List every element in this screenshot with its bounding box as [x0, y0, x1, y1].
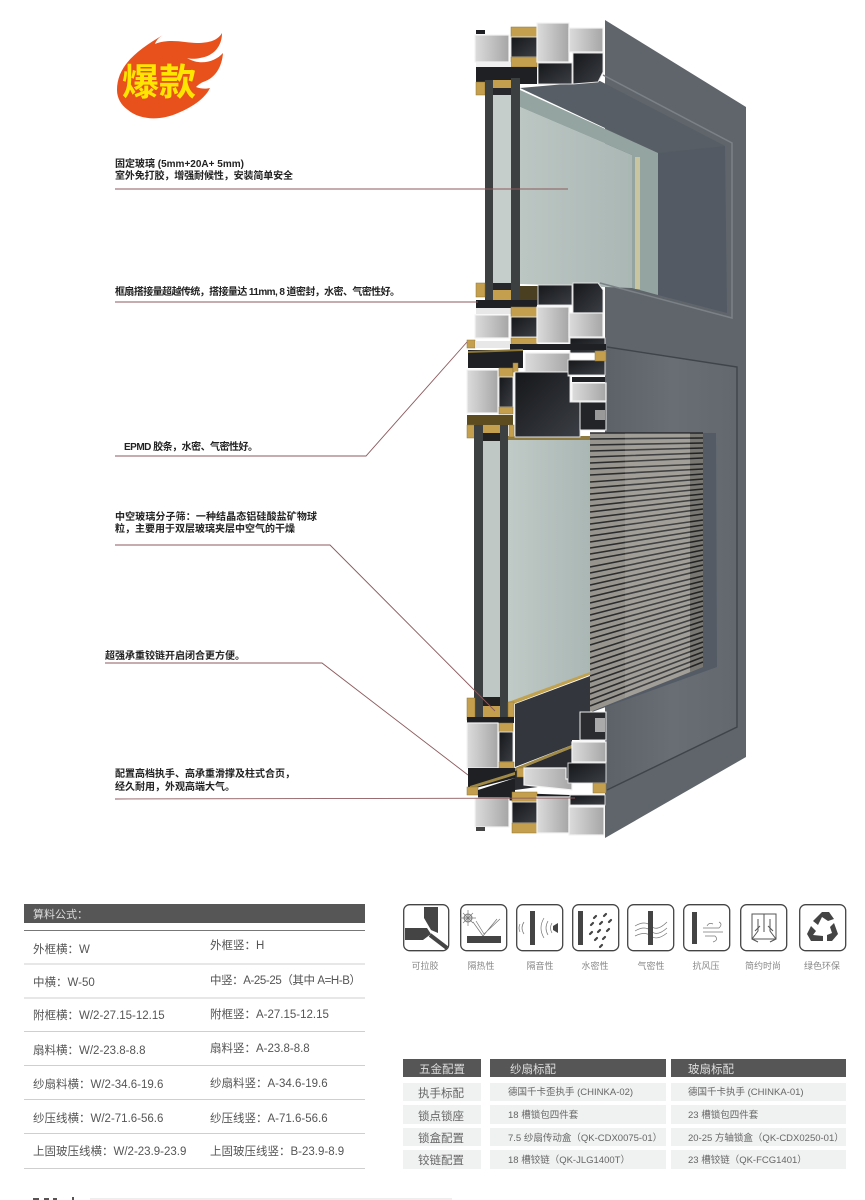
panel: cutting formula table: 中横：W-50 [33, 975, 95, 989]
icon: recycling [800, 905, 846, 971]
panel: cutting formula table: 上固玻压线横：W/2-23.9-23.9 [33, 1144, 186, 1158]
callout: hinge [105, 649, 468, 775]
callout: hardware [115, 767, 575, 799]
upper insulating glass panes [485, 78, 520, 302]
panel: hardware configuration table: 锁点锁座 [418, 1109, 464, 1123]
panel: hardware configuration table: 20-25 方轴锁盒（QK-CDX0250-01） [688, 1132, 844, 1144]
callout: overlap: 框扇搭接量超越传统，搭接量达 11mm, 8 道密封，水密、气密性好。 [115, 285, 400, 298]
flame badge [117, 33, 223, 118]
bottom frame profile [467, 778, 605, 835]
panel: hardware configuration table: 18 槽铰链（QK-JLG1400T） [508, 1154, 630, 1166]
panel: hardware configuration table: 铰链配置 [418, 1153, 464, 1167]
panel: hardware configuration table: 德国千卡执手 (CHINKA-01) [688, 1086, 804, 1098]
upper glass pane [493, 92, 632, 288]
panel: cutting formula table: 扇料横：W/2-23.8-8.8 [33, 1043, 145, 1057]
panel: cutting formula table: 扇料竖：A-23.8-8.8 [210, 1041, 310, 1055]
formula header: 算料公式： [33, 907, 88, 921]
hardware header row: 纱扇标配 [510, 1062, 556, 1076]
upper opening right reveal [658, 146, 727, 313]
callout: hinge: 超强承重铰链开启闭合更方便。 [105, 649, 245, 662]
insect screen mesh [590, 433, 703, 712]
panel: cutting formula table: 外框竖：H [210, 938, 264, 952]
icon: sound insulation: 隔音性 [526, 960, 554, 971]
panel: cutting formula table: 附框横：W/2-27.15-12.15 [33, 1008, 165, 1022]
panel: hardware configuration table: 德国千卡歪执手 (CHINKA-02) [508, 1086, 633, 1098]
callout: EPDM strip: EPMD 胶条，水密、气密性好。 [124, 440, 258, 453]
panel: cutting formula table: 纱扇料横：W/2-34.6-19.6 [33, 1077, 163, 1091]
hardware header row [403, 1059, 846, 1077]
aluminium outer face [605, 20, 746, 838]
panel: hardware configuration table: 23 槽铰链（QK-FCG1401） [688, 1154, 807, 1166]
callout: fixed glass: 室外免打胶，增强耐候性，安装简单安全 [115, 169, 293, 182]
lower sash floor [515, 676, 590, 767]
panel: cutting formula table: 中竖：A-25-25（其中 A=H-B） [210, 974, 361, 987]
panel: hardware configuration table [403, 1059, 846, 1169]
callout: molecular sieve [115, 510, 495, 711]
icon: water tightness [573, 905, 619, 971]
icon: wind pressure: 抗风压 [692, 960, 720, 971]
panel: cutting formula table: 附框竖：A-27.15-12.15 [210, 1007, 329, 1021]
hardware header row: 五金配置 [419, 1062, 465, 1076]
icon: heat insulation: 隔热性 [467, 960, 495, 971]
icon: air tightness [628, 905, 674, 971]
window cross-section illustration [467, 20, 746, 838]
lower glass pane [508, 440, 590, 702]
panel: cutting formula table: 上固玻压线竖：B-23.9-8.9 [210, 1144, 344, 1158]
panel: hardware configuration table: 执手标配 [418, 1086, 464, 1100]
upper glass spacer strip [635, 157, 640, 289]
panel: hardware configuration table: 23 槽锁包四件套 [688, 1109, 759, 1121]
lower panel groove [607, 347, 737, 790]
callout: hardware: 经久耐用，外观高端大气。 [115, 780, 235, 793]
lower insulating glass panes [474, 425, 508, 717]
panel: hardware configuration table: 18 槽锁包四件套 [508, 1109, 579, 1121]
panel: cutting formula table: 外框横：W [33, 942, 90, 956]
callout: hardware: 配置高档执手、高承重滑撑及柱式合页， [115, 767, 295, 780]
callout: fixed glass [115, 157, 568, 189]
callout: fixed glass: 固定玻璃 (5mm+20A+ 5mm) [115, 157, 244, 170]
upper frame rebate [600, 75, 732, 318]
lower opening reveal [590, 433, 717, 712]
lower face panel [607, 348, 737, 790]
icon: water tightness: 水密性 [581, 960, 609, 971]
icon: sealant: 可拉胶 [411, 960, 439, 971]
mid frame profile [475, 283, 605, 353]
icon: heat insulation [460, 905, 507, 971]
upper opening top reveal [520, 81, 725, 153]
panel: cutting formula table: 纱压线横：W/2-71.6-56.6 [33, 1111, 163, 1125]
panel: cutting formula table: 纱压线竖：A-71.6-56.6 [210, 1111, 328, 1125]
top frame profile [475, 23, 603, 95]
sash sill profile [467, 697, 606, 793]
icon: sound insulation [517, 905, 563, 971]
flame badge: 爆款 [122, 62, 196, 103]
sash head profile [467, 340, 606, 438]
panel: hardware configuration table: 锁盒配置 [418, 1131, 464, 1145]
callout: molecular sieve: 中空玻璃分子筛：一种结晶态铝硅酸盐矿物球 [115, 510, 317, 523]
icon: air tightness: 气密性 [637, 960, 665, 971]
upper glass edge band [520, 90, 658, 295]
icon: recycling: 绿色环保 [804, 960, 840, 971]
icon row: performance features [404, 905, 846, 971]
lower glass gold seals [508, 436, 590, 440]
icon: sealant [404, 905, 449, 971]
panel: cutting formula table [24, 904, 365, 1168]
icon: simple door: 简约时尚 [745, 960, 781, 971]
hardware header row: 玻扇标配 [688, 1062, 734, 1076]
callout: EPDM strip [115, 342, 467, 456]
callout: molecular sieve: 粒，主要用于双层玻璃夹层中空气的干燥 [115, 522, 295, 535]
panel: hardware configuration table: 7.5 纱扇传动盒（QK-CDX0075-01） [508, 1132, 662, 1144]
icon: simple door [741, 905, 787, 971]
formula header [24, 904, 365, 923]
panel: cutting formula table: 纱扇料竖：A-34.6-19.6 [210, 1076, 328, 1090]
icon: wind pressure [684, 905, 730, 971]
